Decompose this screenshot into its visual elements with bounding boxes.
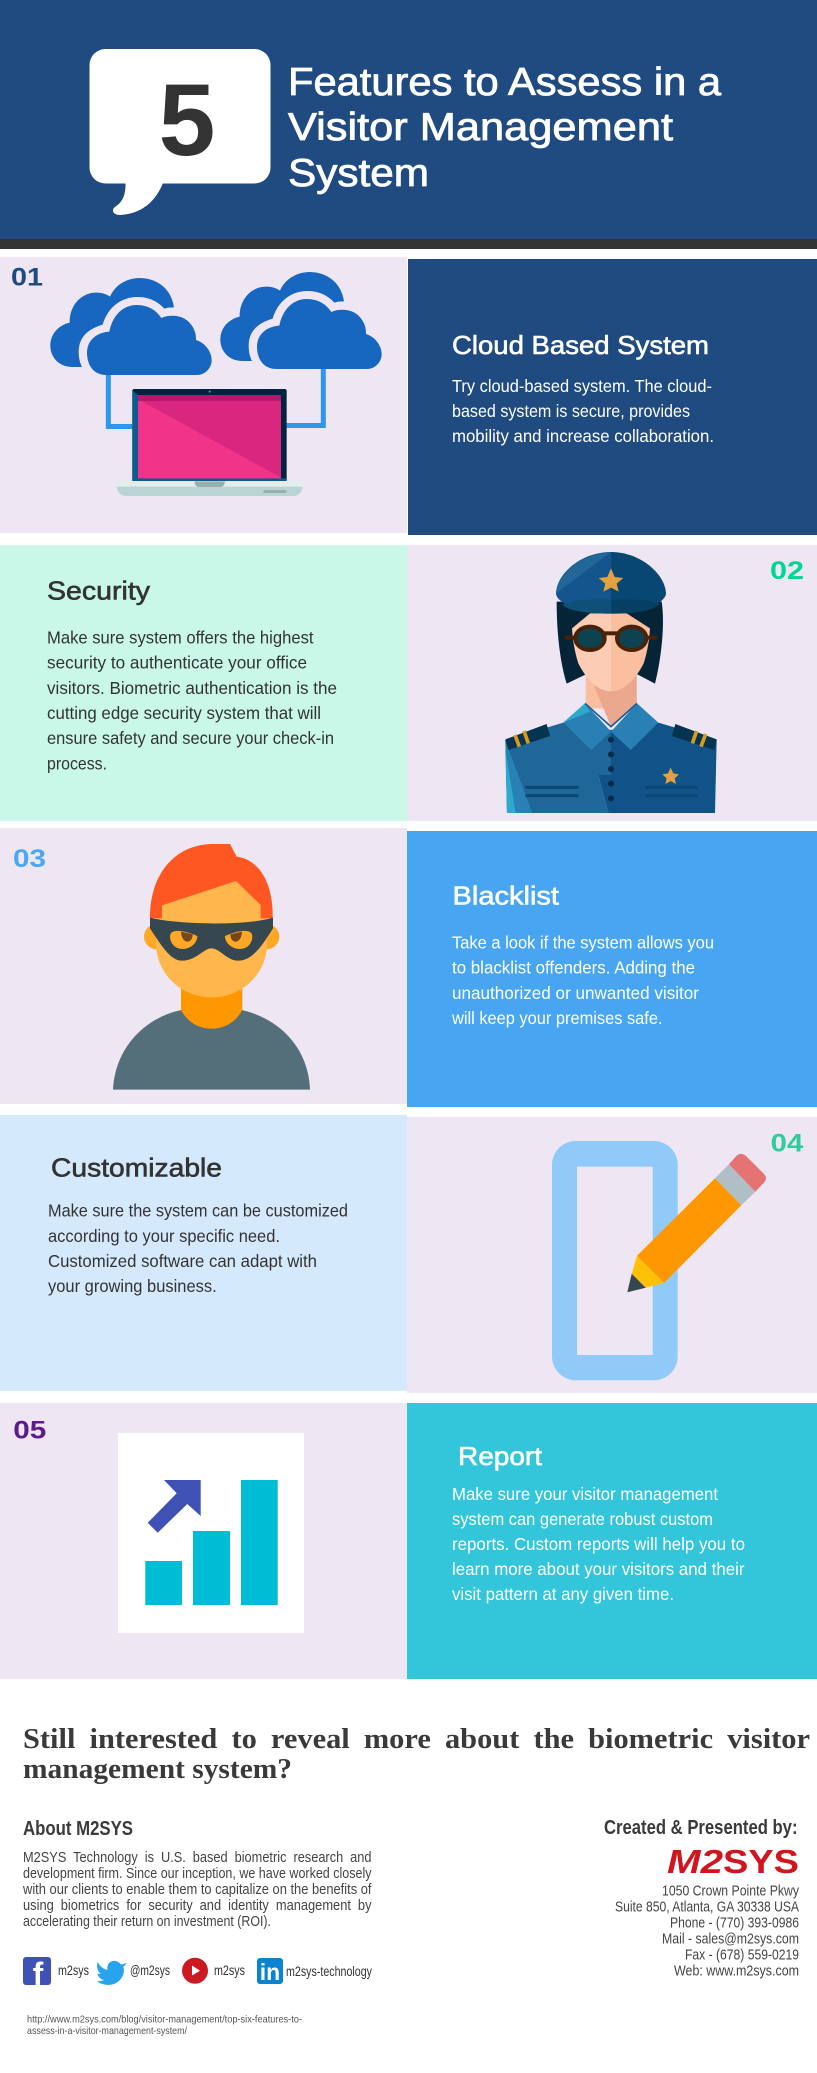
twitter handle: @m2sys [130, 1963, 170, 1978]
text block: visitors. Biometric authentication is the [47, 678, 337, 698]
text block: reports. Custom reports will help you to [452, 1534, 745, 1554]
icon: speech bubble with number 5 [90, 49, 270, 215]
closing question heading [23, 1724, 810, 1785]
icon: youtube [182, 1958, 208, 1984]
closing question heading: management system? [23, 1754, 292, 1785]
text block: according to your specific need. [48, 1226, 280, 1246]
icon: speech bubble with number 5: 5 [159, 63, 215, 177]
icon: clouds connected to laptop [50, 272, 382, 496]
contact details [615, 1883, 799, 1980]
title: System [288, 152, 429, 195]
panel: chart illustration 05 [0, 1403, 407, 1679]
text block: Make sure the system can be customized [48, 1201, 348, 1221]
icon: rising bar chart [118, 1433, 304, 1633]
number 04: 04 [771, 1130, 803, 1158]
icon: facebook: f [33, 1956, 44, 1992]
social links [23, 1956, 372, 1992]
panel: cloud illustration 01 [0, 257, 407, 533]
text block: mobility and increase collaboration. [452, 426, 714, 446]
heading: Blacklist [452, 881, 560, 911]
panel: pencil illustration 04 [407, 1117, 817, 1393]
about M2SYS heading: About M2SYS [23, 1818, 133, 1840]
number 05: 05 [13, 1416, 46, 1444]
text block [452, 1484, 745, 1604]
panel: customizable [0, 1115, 407, 1391]
linkedin handle: m2sys-technology [286, 1964, 372, 1979]
text block: based system is secure, provides [452, 401, 690, 421]
header banner [0, 0, 817, 249]
title: Visitor Management [288, 106, 673, 149]
about M2SYS text: with our clients to enable them to capitalize on the benefits of [22, 1881, 372, 1898]
text block: process. [47, 753, 107, 773]
text block: ensure safety and secure your check-in [47, 728, 334, 748]
text block: Try cloud-based system. The cloud- [452, 376, 712, 396]
panel: thief illustration 03 [0, 828, 407, 1104]
number 03: 03 [13, 845, 46, 873]
number 01: 01 [11, 264, 43, 292]
panel: blacklist [407, 831, 817, 1107]
text block: Customized software can adapt with [48, 1251, 317, 1271]
source URL: assess-in-a-visitor-management-system/ [27, 2025, 187, 2037]
icon: linkedin: in [260, 1959, 280, 1985]
heading: Report [458, 1441, 543, 1471]
text block: to blacklist offenders. Adding the [452, 958, 695, 978]
title: Features to Assess in a [288, 61, 721, 104]
about M2SYS text [22, 1849, 372, 1930]
icon: twitter [97, 1961, 127, 1985]
text block: will keep your premises safe. [451, 1008, 662, 1028]
text block: learn more about your visitors and their [452, 1559, 745, 1579]
youtube handle: m2sys [214, 1963, 245, 1978]
text block [451, 932, 714, 1028]
panel: security [0, 545, 407, 821]
text block: your growing business. [48, 1276, 217, 1296]
logo: M2SYS [667, 1844, 799, 1881]
source URL: http://www.m2sys.com/blog/visitor-management/top-six-features-to- [27, 2014, 302, 2026]
about M2SYS text: M2SYS Technology is U.S. based biometric research and [23, 1849, 372, 1866]
closing question heading: Still interested to reveal more about the biometric visitor [23, 1724, 810, 1755]
icon: form frame and pencil [552, 1141, 766, 1380]
icon: security officer [505, 552, 717, 813]
about M2SYS text: accelerating their return on investment (ROI). [23, 1913, 271, 1930]
heading: Customizable [51, 1153, 222, 1183]
text block: visit pattern at any given time. [452, 1584, 674, 1604]
facebook handle: m2sys [58, 1963, 89, 1978]
heading: Cloud Based System [452, 330, 709, 360]
logo: M2SYS: SYS [723, 1844, 799, 1881]
panel: report [407, 1403, 817, 1679]
text block: Make sure your visitor management [452, 1484, 718, 1504]
number 02: 02 [770, 557, 804, 585]
text block: cutting edge security system that will [47, 703, 321, 723]
text block: Make sure system offers the highest [47, 627, 314, 647]
panel: cloud based system [408, 259, 817, 535]
text block: Take a look if the system allows you [452, 932, 714, 952]
heading: Security [47, 576, 150, 606]
text block: unauthorized or unwanted visitor [452, 983, 699, 1003]
text block [48, 1201, 348, 1296]
logo: M2SYS: M2 [667, 1844, 723, 1881]
text block [47, 627, 337, 773]
text block: security to authenticate your office [47, 653, 307, 673]
icon: facebook [23, 1956, 51, 1992]
icon: masked offender [113, 844, 310, 1090]
panel: officer illustration 02 [407, 545, 817, 821]
source URL [27, 2014, 302, 2037]
title [288, 61, 721, 195]
about M2SYS text: development firm. Since our inception, we have worked closely [23, 1865, 372, 1882]
text block: system can generate robust custom [452, 1509, 713, 1529]
text block [452, 376, 714, 446]
about M2SYS text: using biometrics for security and identity management by [23, 1897, 372, 1914]
